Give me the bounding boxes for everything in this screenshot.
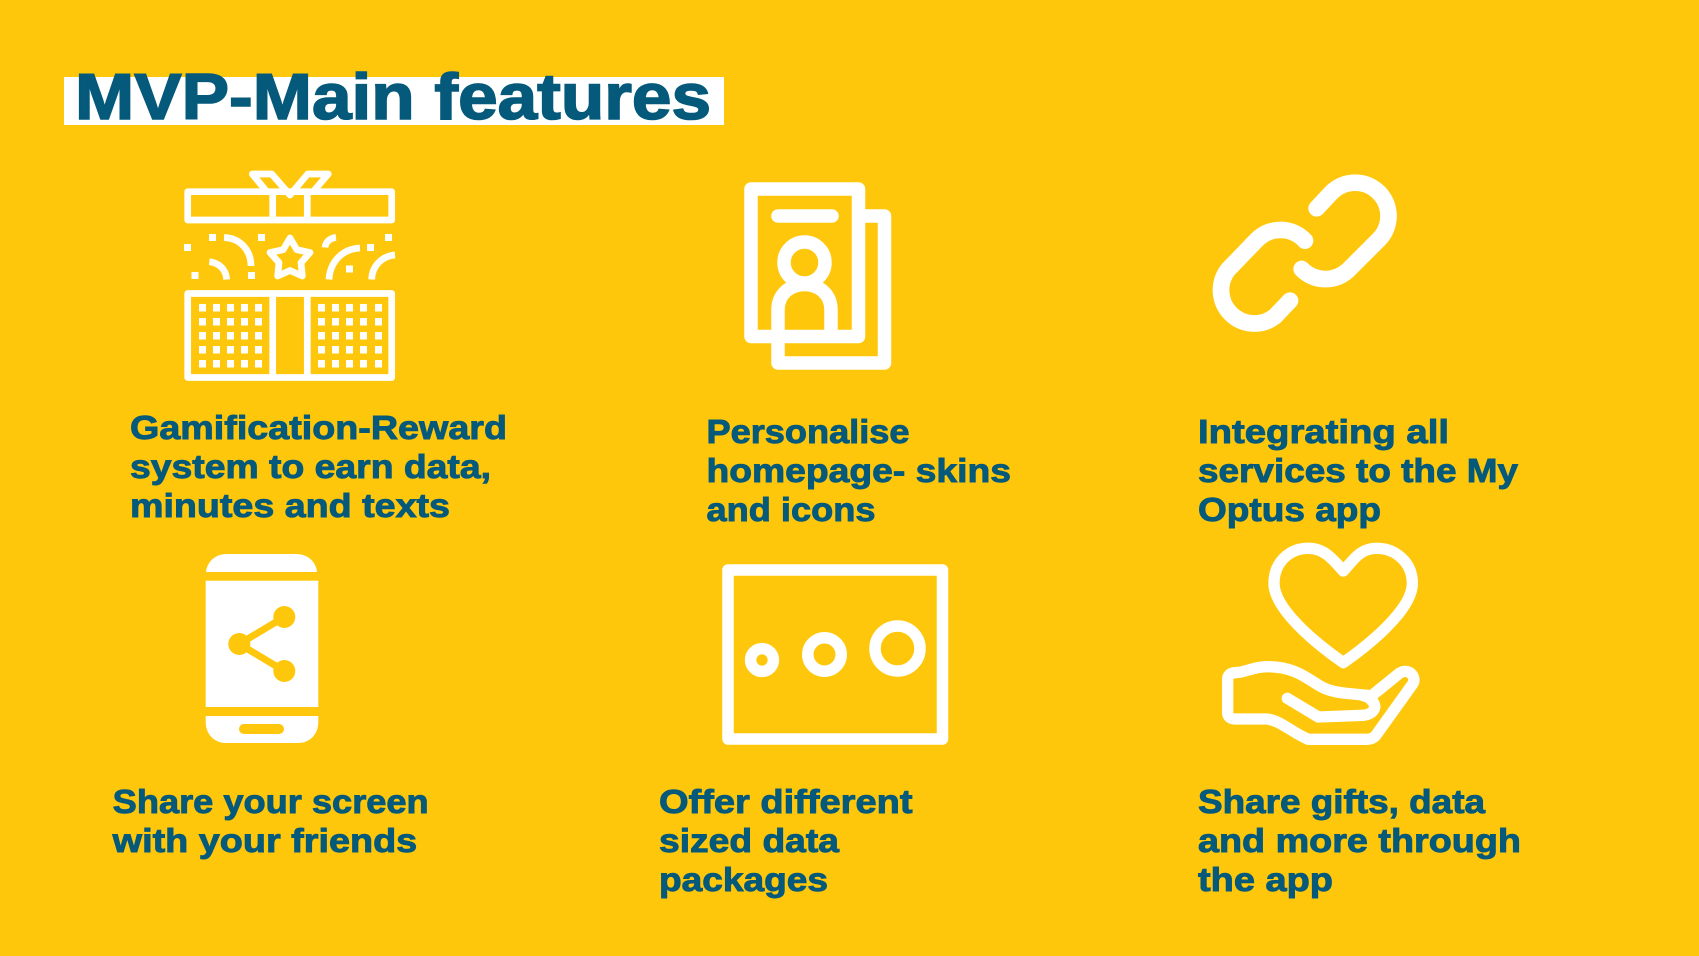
text: gamification: system to earn data,: [130, 448, 491, 485]
text: data packages: [659, 783, 913, 898]
text: share gifts: [1198, 783, 1521, 898]
icon: gift box with star: [184, 174, 395, 378]
text: share screen: Share your screen: [113, 783, 429, 820]
panel: gamification: [130, 174, 507, 524]
text: data packages: sized data: [659, 822, 840, 859]
text: share gifts: Share gifts, data: [1198, 783, 1486, 820]
text: share screen: [112, 783, 429, 859]
text: share screen: with your friends: [112, 822, 417, 859]
text: integrating services: [1198, 413, 1519, 528]
text: share gifts: and more through: [1198, 822, 1521, 859]
text: data packages: packages: [659, 861, 828, 898]
text: integrating services: Integrating all: [1198, 413, 1449, 450]
text: personalise: [706, 413, 1011, 528]
panel: data packages: [659, 570, 942, 898]
panel: share screen: [112, 554, 429, 859]
icon: tablet with three circles: [728, 570, 942, 739]
text: gamification: minutes and texts: [130, 487, 450, 524]
title: MVP-Main features: [75, 60, 711, 133]
text: integrating services: Optus app: [1198, 491, 1381, 528]
text: personalise: and icons: [706, 491, 876, 528]
icon: phone with share symbol: [206, 554, 318, 743]
icon: chain link: [1221, 183, 1389, 323]
text: gamification: Gamification-Reward: [130, 409, 507, 446]
icon: profile cards: [751, 189, 884, 363]
text: integrating services: services to the My: [1198, 452, 1519, 489]
text: share gifts: the app: [1198, 861, 1333, 898]
text: data packages: Offer different: [659, 783, 913, 820]
text: personalise: homepage- skins: [706, 452, 1011, 489]
panel: share gifts: [1198, 548, 1521, 898]
text: gamification: [130, 409, 507, 524]
panel: integrating services: [1198, 183, 1519, 528]
icon: hand holding heart: [1228, 548, 1414, 739]
text: personalise: Personalise: [706, 413, 910, 450]
panel: personalise: [706, 189, 1011, 528]
